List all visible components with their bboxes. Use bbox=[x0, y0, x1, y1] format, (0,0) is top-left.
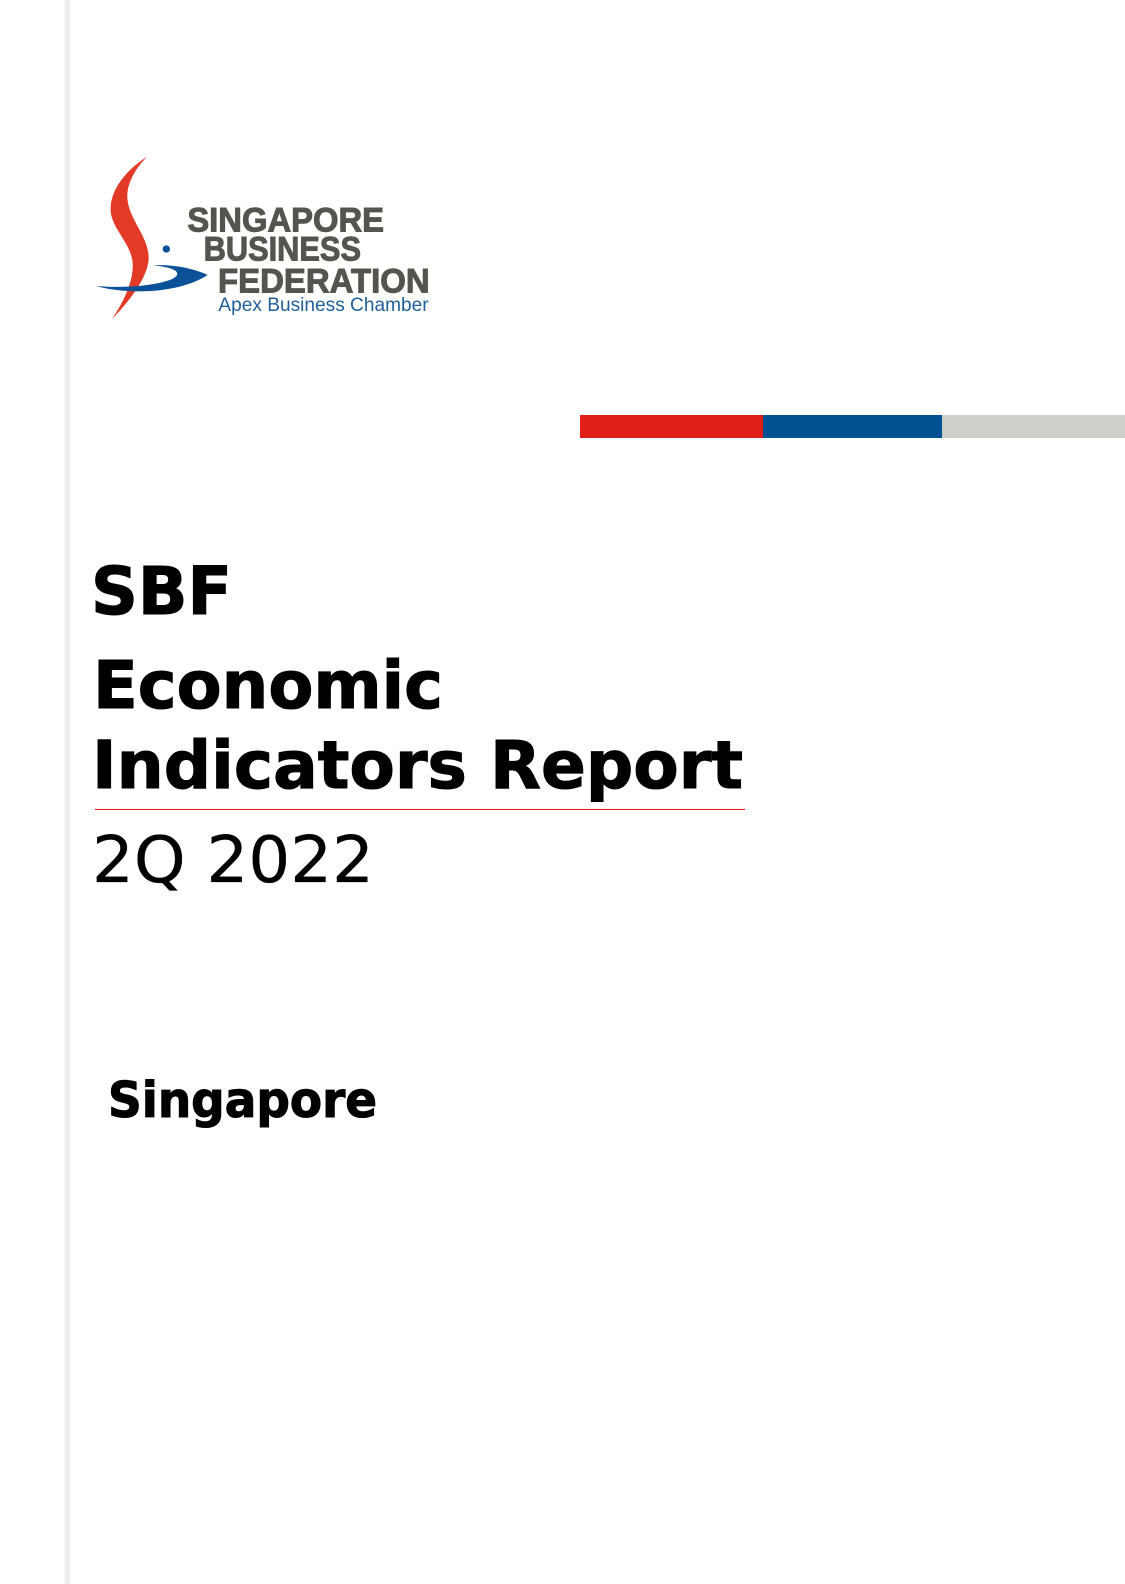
logo text: Singapore: SINGAPORE bbox=[187, 202, 384, 240]
icon: blue swoosh bbox=[96, 265, 208, 291]
left margin strip bbox=[64, 0, 71, 1584]
icon: blue dot bbox=[163, 245, 170, 253]
red rule bbox=[95, 809, 745, 810]
icon: red swoosh bbox=[111, 157, 149, 319]
logo text: Federation: FEDERATION bbox=[218, 262, 430, 300]
logo text: Business: BUSINESS bbox=[204, 231, 361, 269]
country: Singapore: Singapore bbox=[108, 1072, 377, 1129]
title: Indicators Report: Indicators Report bbox=[92, 727, 743, 804]
tricolour bar bbox=[580, 415, 1125, 438]
subtitle: 2Q 2022: 2Q 2022 bbox=[92, 824, 374, 898]
title: Economic: Economic bbox=[93, 647, 443, 724]
logo tagline: Apex Business Chamber bbox=[218, 295, 429, 316]
logo: Singapore Business Federation bbox=[96, 157, 430, 319]
title: SBF: SBF bbox=[91, 553, 232, 630]
